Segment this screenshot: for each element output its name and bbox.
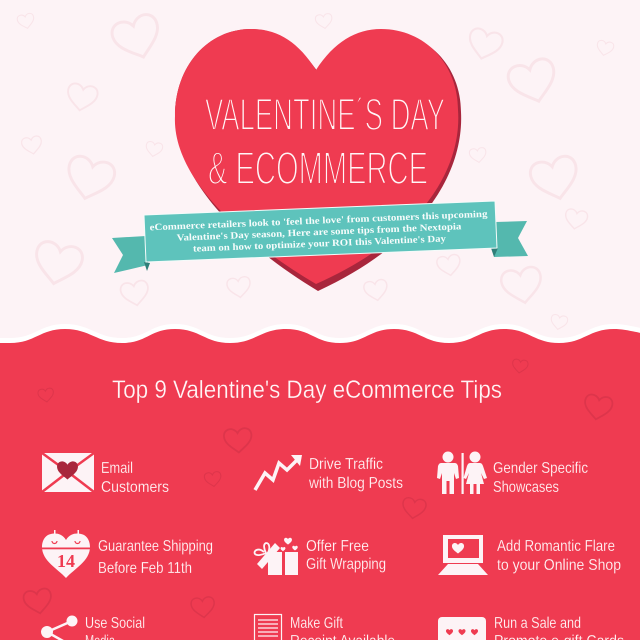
pale outline hearts pattern	[17, 12, 614, 331]
heart shadow	[175, 29, 461, 291]
tip 1: email customers: Customers	[101, 479, 169, 496]
tip text: Use Social	[85, 615, 145, 632]
icon: rising arrow	[255, 455, 302, 490]
heart front	[175, 29, 458, 284]
tip 3: gender specific showcases	[437, 452, 588, 496]
tip text: Drive Traffic	[309, 456, 383, 473]
ribbon text: team on how to optimize your ROI this Valentine's Day	[193, 233, 446, 255]
hero heart	[175, 29, 461, 291]
tip 4: guarantee shipping: Before Feb 11th	[98, 560, 192, 577]
wave red fill	[0, 329, 640, 640]
main title: & ECOMMERCE	[208, 142, 428, 194]
dark outline hearts pattern	[22, 359, 614, 619]
tip 1: email customers	[42, 453, 169, 496]
ribbon left tail	[112, 236, 148, 273]
ribbon right tail	[494, 221, 528, 257]
tip 7: social media	[41, 615, 145, 640]
tip 2: drive traffic: with Blog Posts	[308, 475, 403, 492]
tip text: Offer Free	[306, 538, 369, 555]
icon: man and woman	[437, 452, 487, 494]
tip 9: sale and gift cards	[438, 615, 624, 640]
section heading: Top 9 Valentine's Day eCommerce Tips	[112, 376, 502, 404]
icon: receipt document	[254, 614, 282, 640]
tip text: Make Gift	[290, 615, 343, 632]
icon: calendar heart: 14	[57, 551, 75, 571]
tip 2: drive traffic	[255, 455, 403, 492]
tip 6: romantic flare: to your Online Shop	[497, 557, 621, 574]
tip 4: guarantee shipping	[42, 530, 213, 578]
ribbon text: eCommerce retailers look to 'feel the love' from customers this upcoming	[149, 209, 488, 233]
icon: gift card	[438, 617, 486, 640]
icon: envelope	[42, 453, 94, 492]
tip 5: free gift wrapping	[255, 538, 386, 575]
ribbon text	[149, 209, 489, 256]
main title	[205, 89, 445, 194]
icon: calendar heart	[42, 530, 90, 578]
ribbon folds	[144, 262, 150, 271]
tip 5: free gift wrapping: Gift Wrapping	[306, 556, 386, 573]
tip text: Run a Sale and	[494, 615, 581, 632]
icon: laptop with heart	[438, 535, 488, 575]
main title: VALENTINE´S DAY	[205, 89, 445, 140]
icon: share nodes	[41, 616, 78, 640]
ribbon body	[144, 201, 497, 262]
tip 3: gender specific showcases: Showcases	[493, 479, 559, 496]
tip text: Add Romantic Flare	[497, 538, 615, 555]
wave white border	[0, 324, 640, 640]
tip text: Gender Specific	[493, 460, 588, 477]
ribbon text: Valentine's Day season, Here are some tips from the Nextopia	[176, 221, 462, 244]
tip text: Email	[101, 460, 133, 477]
red wavy section	[0, 324, 640, 640]
ribbon banner	[112, 201, 528, 273]
tip 6: romantic flare	[438, 535, 621, 575]
tip text: Guarantee Shipping	[98, 538, 213, 555]
icon: gift box	[255, 538, 298, 575]
tip 8: gift receipt	[254, 614, 395, 640]
